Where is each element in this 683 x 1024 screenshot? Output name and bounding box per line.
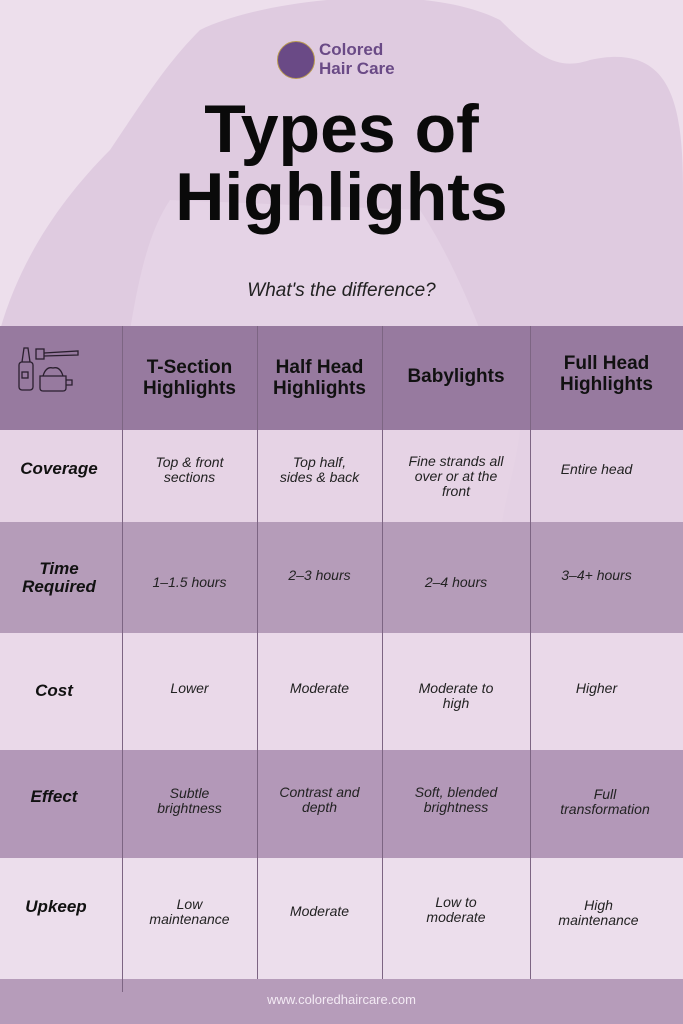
text: maintenance	[149, 911, 230, 927]
footer	[0, 979, 683, 1024]
text: moderate	[426, 909, 486, 925]
text: sections	[164, 469, 215, 485]
row: time: Time	[39, 558, 79, 578]
text: Full	[594, 786, 616, 802]
icon: hair dye tools	[18, 347, 79, 392]
text: Moderate to	[419, 680, 493, 696]
text: 2–3 hours	[288, 566, 351, 582]
text: front	[442, 482, 470, 498]
title: Highlights	[175, 159, 508, 235]
text: Top & front	[156, 454, 223, 470]
logo	[277, 40, 395, 79]
table	[0, 326, 683, 1024]
text: High	[584, 897, 613, 913]
subtitle: What's the difference?	[247, 280, 436, 301]
text: Full Head	[564, 353, 649, 374]
text: transformation	[560, 801, 650, 817]
row: cost: Cost	[35, 680, 73, 700]
text: 3–4+ hours	[561, 566, 632, 582]
row: time	[22, 558, 96, 596]
text: 2–4 hours	[425, 574, 487, 590]
text: Lower	[170, 680, 209, 696]
header labels	[143, 357, 236, 399]
text: Low	[177, 896, 202, 912]
row: time: Required	[22, 576, 96, 596]
text: Contrast and	[279, 784, 360, 800]
footer: www.coloredhaircare.com	[267, 992, 416, 1007]
text: brightness	[424, 799, 488, 815]
text: Babylights	[407, 366, 505, 386]
text: Subtle	[170, 785, 209, 801]
header labels: T-Section	[147, 357, 232, 378]
icon: logo circle	[277, 41, 315, 79]
title	[175, 91, 508, 235]
text: Moderate	[290, 902, 349, 918]
text: brightness	[157, 800, 222, 816]
row: upkeep: Upkeep	[25, 896, 87, 916]
text: Higher	[576, 680, 617, 696]
row: effect: Effect	[31, 786, 77, 806]
text: Moderate	[290, 680, 349, 696]
text: Top half,	[293, 454, 346, 470]
text: Low to	[435, 894, 477, 910]
text: 1–1.5 hours	[153, 574, 226, 590]
text: over or at the	[415, 468, 497, 484]
text: Highlights	[273, 378, 366, 399]
text: Fine strands all	[409, 452, 503, 468]
text: maintenance	[558, 912, 639, 928]
logo: Colored	[319, 40, 383, 59]
logo: Hair Care	[319, 59, 395, 78]
text: Half Head	[276, 357, 363, 378]
text: Entire head	[561, 460, 632, 476]
header labels: Highlights	[143, 378, 236, 399]
row: coverage: Coverage	[20, 458, 98, 478]
text: depth	[302, 799, 337, 815]
text: high	[443, 695, 469, 711]
title: Types of	[204, 91, 479, 167]
text: Soft, blended	[415, 784, 497, 800]
text: sides & back	[280, 469, 359, 485]
text: Highlights	[560, 374, 653, 395]
